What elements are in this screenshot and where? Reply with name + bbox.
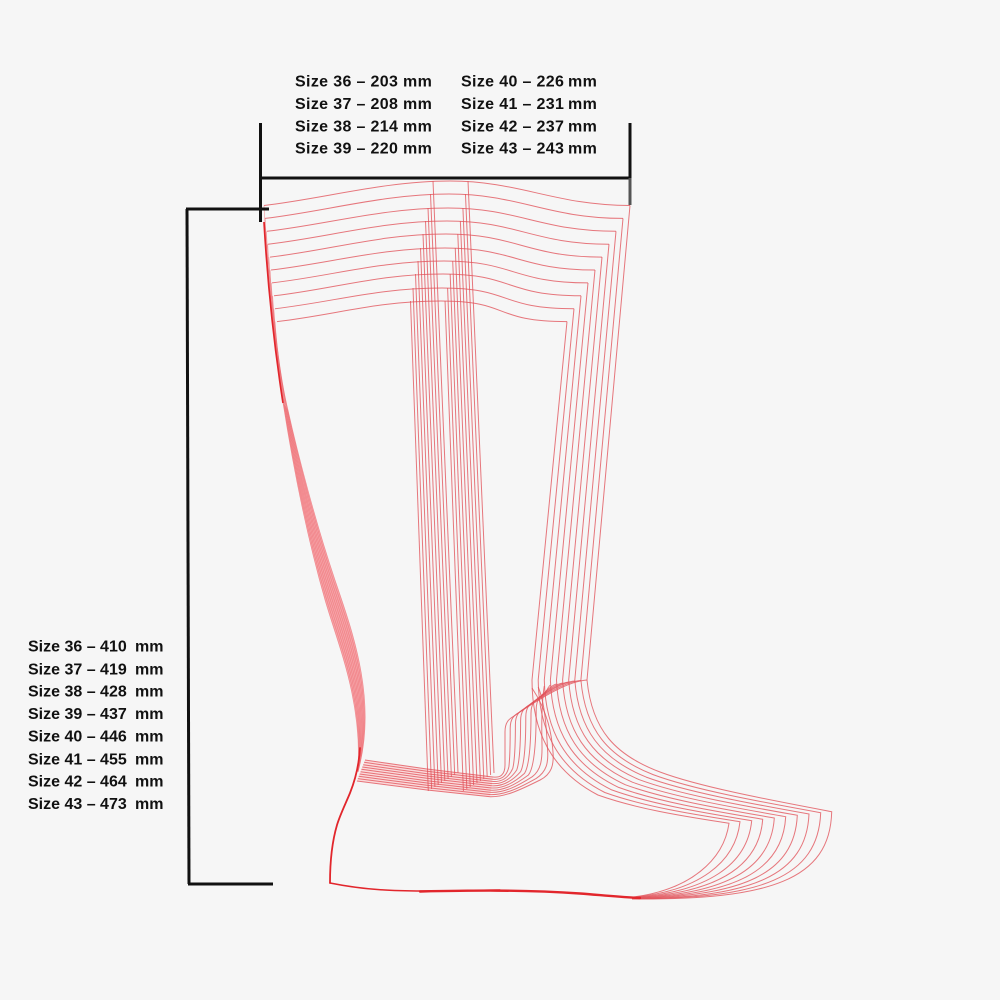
length sizes: mm [135,684,163,701]
width sizes, left column [295,74,432,158]
width sizes, right column: mm [568,141,597,158]
width sizes, right column: Size 43 – 243 [461,141,564,158]
width sizes, left column: mm [403,141,432,158]
sock top cuff edges [264,181,630,322]
width sizes, right column: Size 41 – 231 [461,96,564,113]
ankle band shading [357,760,493,797]
width dimension bracket [260,123,630,222]
length dimension bracket [186,209,273,884]
length sizes: mm [135,729,163,746]
width sizes, left column: Size 36 – 203 [295,74,398,91]
length sizes: Size 43 – 473 [28,796,127,813]
length sizes: mm [135,751,163,768]
length sizes: mm [135,706,163,723]
width sizes, right column: mm [568,74,597,91]
width sizes, left column: Size 38 – 214 [295,119,398,136]
length sizes: mm [135,796,163,813]
length sizes: Size 36 – 410 [28,639,127,656]
length sizes: Size 41 – 455 [28,751,127,768]
width sizes, right column: Size 42 – 237 [461,119,564,136]
width sizes, left column: Size 37 – 208 [295,96,398,113]
length sizes: mm [135,661,163,678]
heel and sole outline [330,748,640,898]
width sizes, right column: mm [568,96,597,113]
width sizes, left column: mm [403,96,432,113]
width sizes, left column: mm [403,119,432,136]
length sizes: mm [135,774,163,791]
back of leg contour band [264,206,365,772]
length sizes [28,639,163,813]
width sizes, left column: Size 39 – 220 [295,141,398,158]
width sizes, right column [461,74,597,158]
length sizes: Size 40 – 446 [28,729,127,746]
length sizes: Size 42 – 464 [28,774,127,791]
width sizes, right column: mm [568,119,597,136]
length sizes: Size 37 – 419 [28,661,127,678]
length sizes: Size 39 – 437 [28,706,127,723]
length sizes: Size 38 – 428 [28,684,127,701]
front of leg, foot top and toe contours [532,206,832,899]
width sizes, right column: Size 40 – 226 [461,74,564,91]
ankle band and heel turn contours [357,680,587,797]
width sizes, left column: mm [403,74,432,91]
length sizes: mm [135,639,163,656]
centre vertical seam lines [410,181,494,791]
